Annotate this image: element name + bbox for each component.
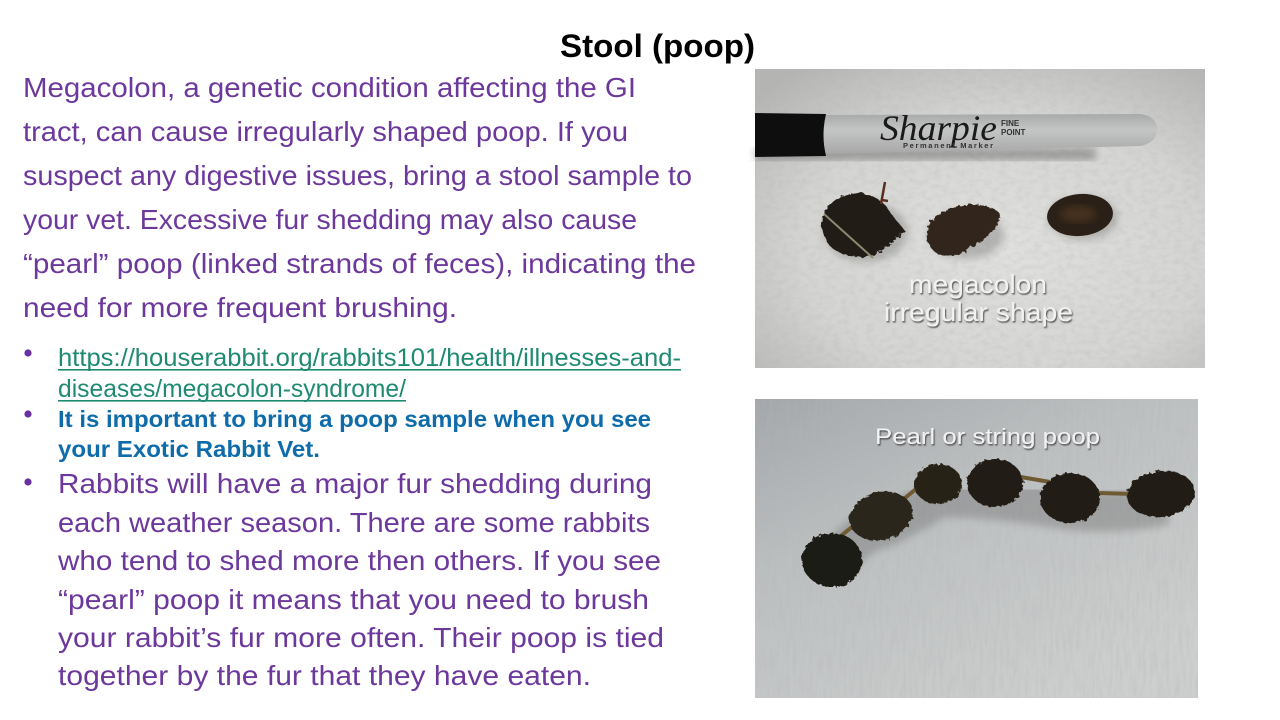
- bullet: link to megacolon article: [24, 344, 681, 403]
- photo caption: [884, 269, 1073, 327]
- bullet: fur shedding: Rabbits will have a major fur shedding during: [58, 468, 652, 499]
- photo: megacolon irregular shape: [755, 69, 1205, 368]
- photo caption: megacolon: [909, 269, 1047, 299]
- photo caption: Pearl or string poop: [875, 424, 1100, 449]
- icon: marker pen: Permanent Marker: [903, 141, 993, 150]
- icon: linked pellets: [802, 459, 1197, 587]
- bullet: fur shedding: together by the fur that they have eaten.: [58, 660, 591, 691]
- bullet: bring a poop sample: [24, 406, 651, 462]
- bullet: fur shedding: your rabbit’s fur more often. Their poop is tied: [58, 622, 664, 653]
- intro paragraph: [23, 72, 696, 323]
- intro paragraph: suspect any digestive issues, bring a stool sample to: [23, 160, 692, 191]
- intro paragraph: your vet. Excessive fur shedding may also cause: [23, 204, 637, 235]
- bullet: bring a poop sample: It is important to bring a poop sample when you see: [58, 406, 651, 432]
- icon: marker pen: Sharpie: [880, 108, 997, 148]
- bullet: link to megacolon article: diseases/megacolon-syndrome/: [58, 375, 406, 403]
- intro paragraph: Megacolon, a genetic condition affecting the GI: [23, 72, 636, 103]
- intro paragraph: tract, can cause irregularly shaped poop. If you: [23, 116, 628, 147]
- icon: irregular pellets: [822, 182, 1118, 262]
- title: Stool (poop): [560, 28, 755, 64]
- icon: marker pen: POINT: [1001, 128, 1026, 137]
- bullet: link to megacolon article: https://houserabbit.org/rabbits101/health/illnesses-and-: [58, 344, 681, 372]
- intro paragraph: “pearl” poop (linked strands of feces), indicating the: [23, 248, 696, 279]
- photo: pearl or string poop: [755, 399, 1198, 698]
- bullet: fur shedding: “pearl” poop it means that you need to brush: [58, 584, 649, 615]
- icon: marker pen: [755, 108, 1157, 160]
- intro paragraph: need for more frequent brushing.: [23, 292, 457, 323]
- bullet: fur shedding: [24, 468, 664, 691]
- photo caption: irregular shape: [884, 297, 1073, 327]
- bullet: fur shedding: each weather season. There are some rabbits: [58, 507, 650, 538]
- icon: marker pen: FINE: [1001, 119, 1020, 128]
- bullet: fur shedding: who tend to shed more then others. If you see: [57, 545, 661, 576]
- bullet: bring a poop sample: your Exotic Rabbit Vet.: [58, 436, 320, 462]
